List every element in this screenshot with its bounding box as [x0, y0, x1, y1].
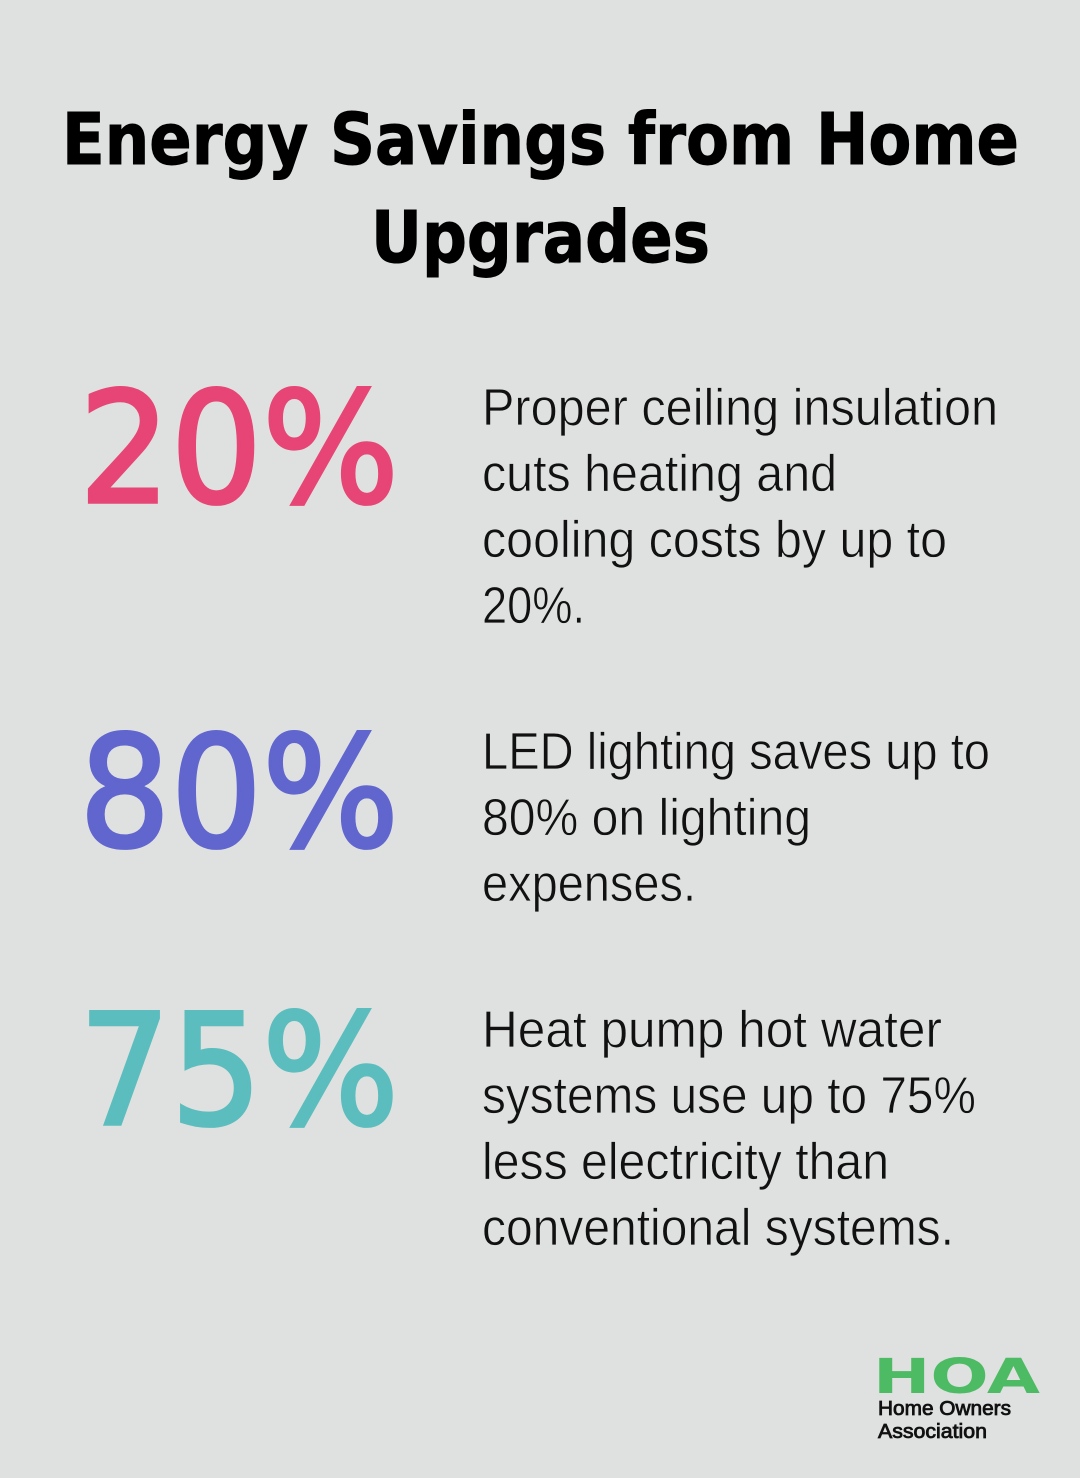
- panel: LED lighting: [79, 704, 990, 913]
- text: LED lighting description: LED lighting saves up to: [482, 723, 990, 781]
- text: heat pump description: [482, 1001, 976, 1257]
- text: ceiling insulation description: 20%.: [482, 577, 585, 635]
- title: [62, 98, 1019, 279]
- text: ceiling insulation description: [482, 379, 998, 635]
- text: LED lighting description: [482, 723, 990, 913]
- text: heat pump description: less electricity than: [482, 1133, 889, 1191]
- panel: ceiling insulation: [79, 360, 998, 635]
- logo: Home Owners Association: HOA: [873, 1349, 1040, 1405]
- text: ceiling insulation description: cuts heating and: [482, 445, 837, 503]
- stat: 20%: 20%: [79, 360, 399, 539]
- text: heat pump description: systems use up to 75%: [482, 1067, 976, 1125]
- title: Upgrades: [371, 196, 710, 279]
- logo: Home Owners Association: Association: [878, 1421, 987, 1443]
- stat: 75%: 75%: [79, 982, 399, 1161]
- logo: Home Owners Association: [873, 1349, 1040, 1443]
- text: heat pump description: conventional systems.: [482, 1199, 954, 1257]
- panel: heat pump: [79, 982, 976, 1257]
- text: ceiling insulation description: cooling costs by up to: [482, 511, 947, 569]
- logo: Home Owners Association: Home Owners: [878, 1398, 1011, 1420]
- stat: 80%: 80%: [79, 704, 399, 883]
- text: LED lighting description: expenses.: [482, 855, 696, 913]
- text: heat pump description: Heat pump hot water: [482, 1001, 942, 1059]
- text: LED lighting description: 80% on lighting: [482, 789, 811, 847]
- text: ceiling insulation description: Proper ceiling insulation: [482, 379, 998, 437]
